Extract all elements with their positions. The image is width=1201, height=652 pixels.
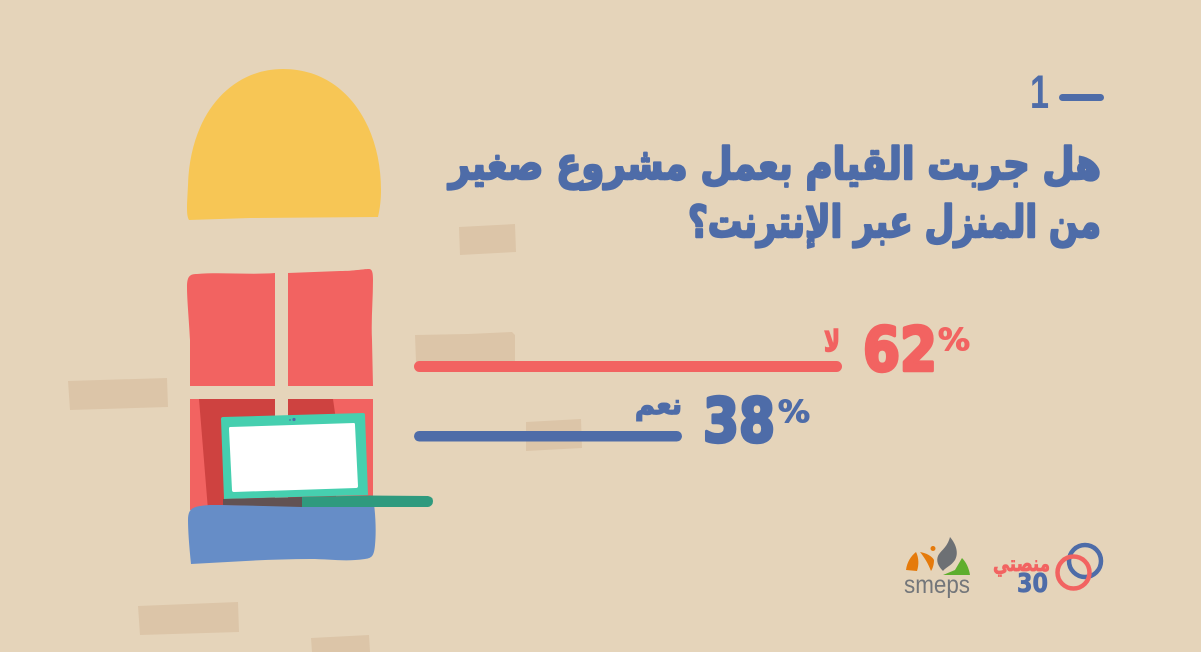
value: 38%: 38: [703, 386, 775, 456]
logo wordmark: منصتي: [993, 552, 1050, 577]
laptop: [221, 413, 433, 507]
window panes: [187, 269, 373, 510]
orange leaves: [906, 552, 934, 571]
green leaf: [943, 558, 970, 575]
background bricks: [68, 224, 582, 652]
value: 62%: %: [938, 323, 970, 358]
laptop camera: [289, 418, 296, 421]
smeps wordmark: smeps: [904, 571, 970, 599]
logo number: 30: [1017, 569, 1048, 599]
laptop lid: [221, 413, 368, 499]
rings: [1069, 545, 1101, 577]
question heading: [447, 139, 1101, 248]
gray leaf: [937, 537, 957, 571]
question number: 1: [1030, 65, 1049, 118]
bar: yes: [414, 386, 810, 456]
value: 38%: %: [778, 395, 810, 430]
value: 62%: 62: [863, 314, 937, 386]
laptop screen: [229, 423, 358, 492]
cushion: [188, 504, 376, 564]
window arch: [187, 69, 381, 220]
bar: no: [414, 314, 970, 386]
laptop base: [302, 496, 433, 507]
laptop hinge: [223, 497, 302, 507]
question number: [1030, 65, 1104, 118]
curtains: [199, 399, 336, 510]
logo: 30 platform: [993, 545, 1101, 599]
logo: smeps: [904, 537, 970, 599]
label: no: لا: [824, 324, 840, 358]
label: yes: نعم: [635, 388, 682, 421]
